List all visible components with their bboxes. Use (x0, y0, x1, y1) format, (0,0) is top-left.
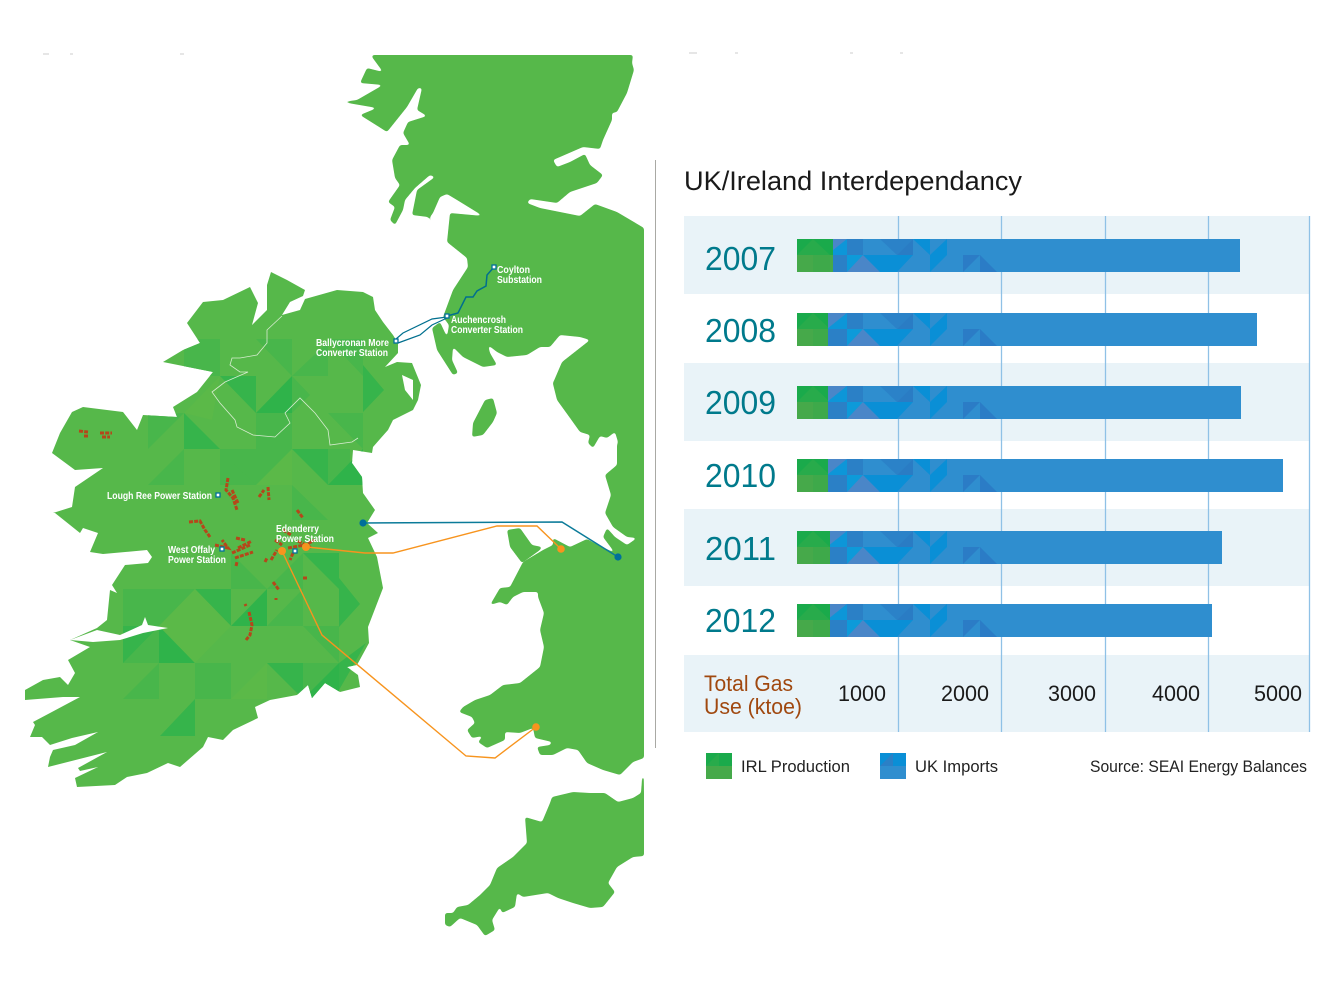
axis tick labels: 2000 (941, 681, 989, 706)
station markers (216, 265, 496, 553)
axis tick labels: 1000 (838, 681, 886, 706)
blue interconnector end points (359, 519, 622, 561)
row 2008 (705, 312, 1257, 349)
chart title: UK/Ireland Interdependancy (684, 166, 1022, 196)
bar chart (684, 216, 1310, 732)
axis tick labels: 5000 (1254, 681, 1302, 706)
legend: IRL Production: IRL Production (741, 757, 850, 776)
faceted triangle texture (123, 339, 384, 736)
row 2007: 2007 (705, 240, 776, 277)
legend: UK Imports: UK Imports (915, 757, 998, 776)
axis title: Use (ktoe) (704, 694, 802, 719)
label: Auchencrosh (451, 314, 523, 336)
divider between map and chart (654, 160, 656, 748)
row 2012 (705, 602, 1212, 639)
Isle of Man (472, 398, 497, 437)
scan residue specks along top edge (43, 53, 903, 54)
label: Auchencrosh: Auchencrosh (451, 314, 506, 326)
row 2011: 2011 (705, 530, 776, 567)
label: Coylton (497, 264, 542, 286)
label: Ballycronan More (316, 337, 389, 359)
Devon and Cornwall (445, 777, 644, 936)
label: West Offaly: West Offaly (168, 544, 215, 556)
axis tick labels (838, 681, 1302, 706)
row 2010: 2010 (705, 457, 776, 494)
label: Coylton: Substation (497, 274, 542, 286)
East-West interconnector line (363, 522, 618, 557)
row 2009 (705, 384, 1241, 421)
axis tick labels: 3000 (1048, 681, 1096, 706)
legend: IRL Production (706, 753, 850, 779)
label: Coylton: Coylton (497, 264, 530, 276)
label: Edenderry: Edenderry (276, 523, 319, 535)
source note: Source: SEAI Energy Balances (1090, 757, 1307, 776)
map of Ireland and Great Britain (25, 55, 644, 936)
label: Ballycronan More: Converter Station (316, 347, 388, 359)
row 2009: 2009 (705, 384, 776, 421)
island of Ireland (25, 272, 421, 787)
cable Auchencrosh to Coylton (447, 267, 494, 316)
gas pipeline to south Wales (282, 551, 536, 758)
Strangford Lough (402, 375, 413, 400)
axis title (704, 671, 802, 719)
gas pipeline to north Wales (307, 526, 561, 553)
row 2011 (705, 530, 1222, 567)
orange pipeline end points (278, 543, 565, 731)
Great Britain: Scotland, England and Wales landmass (342, 55, 644, 775)
label: Auchencrosh: Converter Station (451, 324, 523, 336)
label: Ballycronan More: Ballycronan More (316, 337, 389, 349)
label: Edenderry: Power Station (276, 533, 334, 545)
Anglesey (507, 528, 542, 563)
label: Edenderry (276, 523, 334, 545)
label: West Offaly (168, 544, 226, 566)
row 2007 (705, 239, 1240, 277)
Shannon estuary (70, 617, 168, 642)
legend: UK Imports (880, 753, 998, 779)
interconnector: Moyle cable pair Ballycronan to Auchencrosh (396, 317, 447, 343)
label: Lough Ree: Lough Ree Power Station (107, 490, 212, 502)
label: West Offaly: Power Station (168, 554, 226, 566)
peat bog areas (79, 431, 315, 640)
row 2010 (705, 457, 1283, 494)
axis title: Total Gas (704, 671, 793, 696)
axis tick labels: 4000 (1152, 681, 1200, 706)
legend (706, 753, 1307, 779)
gridlines (898, 216, 1310, 732)
row 2012: 2012 (705, 602, 776, 639)
row 2008: 2008 (705, 312, 776, 349)
row bands (684, 216, 1310, 732)
Northern Ireland border (212, 316, 358, 445)
station labels (107, 264, 542, 566)
